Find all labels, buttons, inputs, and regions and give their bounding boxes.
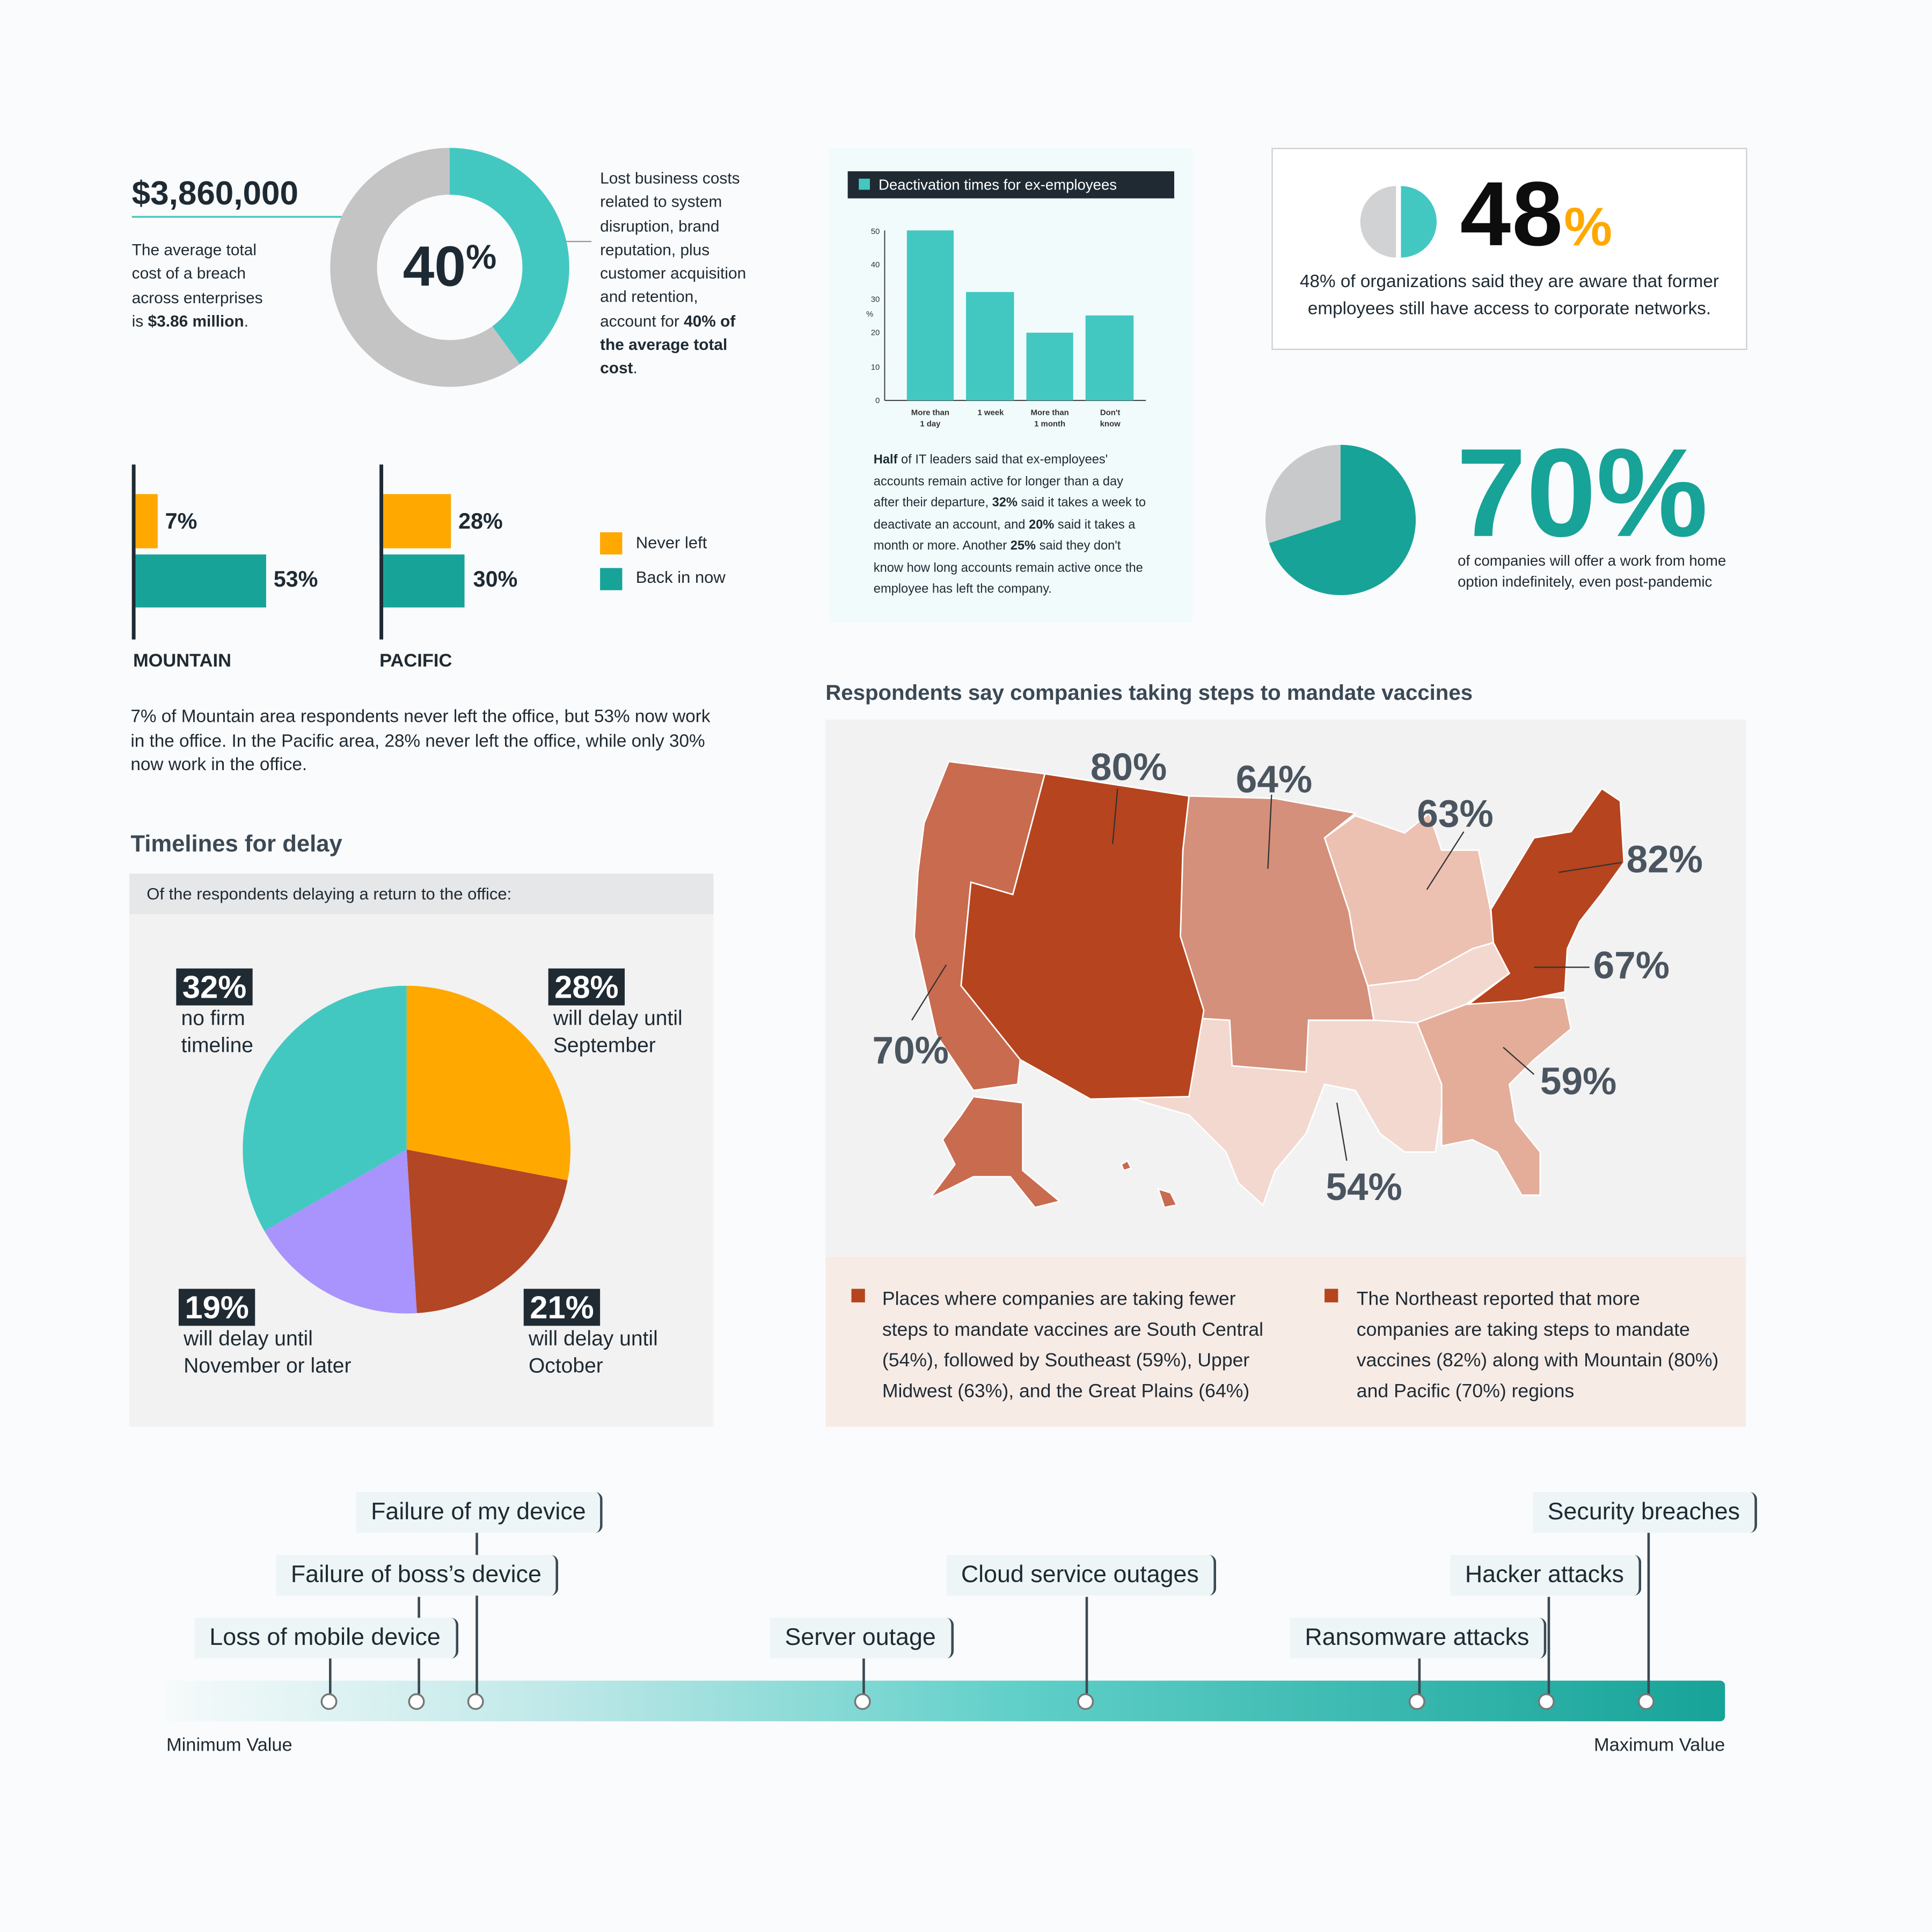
70% description: of companies will offer a work from home <box>1458 552 1726 569</box>
label 32%: timeline <box>181 1034 253 1057</box>
label 21%: 21% <box>530 1289 594 1326</box>
label 28%: will delay until <box>553 1007 683 1030</box>
bar chart: mountain vs pacific <box>132 465 517 671</box>
label 28% <box>548 968 683 1057</box>
south central <box>1128 1018 1454 1205</box>
panel header <box>129 874 713 914</box>
bar chart: 50 <box>871 227 880 236</box>
regional paragraph: 7% of Mountain area respondents never left the office, but 53% now work in the office. In the Pacific area, 28% never left the office, while only 30% now work in the office. <box>130 707 711 775</box>
bar chart: More than <box>911 408 949 418</box>
donut chart 40%: 40 <box>403 235 466 298</box>
panel: US map: 59% <box>1540 1060 1616 1103</box>
timeline connectors and dots <box>321 1533 1655 1710</box>
panel: delay pie <box>129 874 713 1427</box>
great plains <box>1180 796 1374 1072</box>
pacific <box>914 762 1045 1091</box>
bar chart: mountain vs pacific: PACIFIC <box>379 650 452 671</box>
northeast <box>1469 788 1624 1004</box>
chart caption: Half of IT leaders said that ex-employees' accounts remain active for longer than a day after their departure, 32% said it takes a week to deactivate an account, and 20% said it takes a month or more. Another 25% said they don't know how long accounts remain active once the employee has left the company. <box>874 453 1146 596</box>
big number 48%: 48% <box>1460 163 1613 265</box>
chart header <box>848 171 1174 199</box>
legend: Back in now <box>636 568 726 587</box>
bar chart: 0 <box>875 396 880 405</box>
bar chart: 40 <box>871 260 880 269</box>
bar chart: More than <box>1031 408 1069 418</box>
big number 70%: 70% <box>1457 423 1708 563</box>
bar chart: 1 month <box>1034 419 1065 428</box>
bar chart: 20 <box>871 328 880 337</box>
panel: US map: 82% <box>1627 839 1703 881</box>
label: cloud service outages: Cloud service outages <box>961 1561 1199 1588</box>
panel: US map: 67% <box>1593 945 1670 987</box>
label 28%: September <box>553 1034 656 1057</box>
70% description <box>1458 552 1726 590</box>
panel: deactivation bar chart <box>829 148 1192 622</box>
bar chart: 1 day <box>920 419 941 428</box>
bar chart: 1 week <box>977 408 1004 418</box>
donut chart 40% <box>330 148 569 387</box>
axis label max: Maximum Value <box>1594 1735 1725 1756</box>
mountain <box>961 774 1204 1099</box>
note: fewer steps: Places where companies are taking fewer steps to mandate vaccines are South Central (54%), followed by Southeast (59%), Upper Midwest (63%), and the Great Plains (64%) <box>882 1289 1263 1402</box>
bar chart: % <box>866 310 873 319</box>
panel: US map: 63% <box>1417 793 1494 836</box>
48% description: employees still have access to corporate networks. <box>1308 299 1711 319</box>
48% description: 48% of organizations said they are aware that former <box>1300 272 1719 292</box>
legend <box>600 532 726 590</box>
label: loss of mobile device: Loss of mobile device <box>209 1624 441 1651</box>
donut chart 40%: % <box>466 238 496 276</box>
label: failure of my device <box>356 1492 603 1533</box>
panel: 48% stat <box>1271 148 1747 350</box>
label: failure of my device: Failure of my device <box>371 1498 586 1525</box>
bar chart: Don't <box>1100 408 1120 418</box>
alaska <box>930 1096 1059 1208</box>
bar chart: mountain vs pacific: 30% <box>473 567 517 591</box>
panel: US map: 80% <box>1091 746 1167 788</box>
bar chart: mountain vs pacific: 28% <box>458 509 503 533</box>
bar chart: 10 <box>871 363 880 372</box>
label: hacker attacks: Hacker attacks <box>1465 1561 1624 1588</box>
upper midwest light <box>1324 813 1494 986</box>
label: security breaches <box>1533 1492 1757 1533</box>
axis label min: Minimum Value <box>166 1735 292 1756</box>
bar chart: 30 <box>871 295 880 304</box>
label 32%: no firm <box>181 1007 245 1030</box>
label 19%: 19% <box>185 1289 249 1326</box>
48% description <box>1300 272 1719 319</box>
timeline gradient bar <box>166 1681 1725 1721</box>
panel: US map: 54% <box>1326 1166 1402 1209</box>
pie chart <box>243 985 570 1314</box>
bar chart <box>866 227 1146 428</box>
label: server outage <box>770 1618 953 1658</box>
label: loss of mobile device <box>195 1618 458 1658</box>
heading: timelines for delay: Timelines for delay <box>130 832 342 858</box>
label: ransomware attacks <box>1290 1618 1547 1658</box>
bar chart: mountain vs pacific: 7% <box>165 509 197 533</box>
label 32% <box>176 968 253 1057</box>
label: failure of boss's device <box>276 1555 559 1596</box>
bar chart: mountain vs pacific: 53% <box>274 567 318 591</box>
label 21%: will delay until <box>529 1327 658 1350</box>
panel: US map: 64% <box>1236 758 1312 801</box>
label 28%: 28% <box>554 969 619 1005</box>
label: hacker attacks <box>1450 1555 1641 1596</box>
lower midwest / KY TN <box>1367 942 1510 1023</box>
label 21% <box>524 1289 658 1378</box>
panel header: Of the respondents delaying a return to the office: <box>147 884 511 903</box>
label 32%: 32% <box>182 969 246 1005</box>
label: failure of boss's device: Failure of boss’s device <box>291 1561 541 1588</box>
label 21%: October <box>529 1354 603 1378</box>
icon: pie 48 <box>1360 186 1437 258</box>
panel: US map: 70% <box>873 1029 949 1072</box>
southeast <box>1417 996 1571 1195</box>
bar chart: know <box>1100 419 1121 428</box>
70% description: option indefinitely, even post-pandemic <box>1458 573 1712 590</box>
bar chart: mountain vs pacific: MOUNTAIN <box>133 650 231 671</box>
chart header: Deactivation times for ex-employees <box>879 176 1117 193</box>
legend: Never left <box>636 533 707 552</box>
label 19%: will delay until <box>184 1327 313 1350</box>
label 19% <box>178 1289 351 1378</box>
label: security breaches: Security breaches <box>1548 1498 1740 1525</box>
label: cloud service outages <box>946 1555 1216 1596</box>
label: server outage: Server outage <box>785 1624 936 1651</box>
headline: breach cost: $3,860,000 <box>132 175 298 212</box>
pie chart 70% <box>1265 444 1416 595</box>
label: ransomware attacks: Ransomware attacks <box>1305 1624 1529 1651</box>
breach cost description: The average total cost of a breach across enterprises is $3.86 million. <box>132 240 263 330</box>
lost business costs text: Lost business costs related to system disruption, brand reputation, plus customer acquisition and retention, account for 40% of the average total cost. <box>600 169 746 377</box>
panel: US map <box>825 720 1746 1257</box>
teal connector line <box>132 216 342 218</box>
label 19%: November or later <box>184 1354 351 1378</box>
panel: map notes <box>825 1257 1746 1427</box>
note: northeast: The Northeast reported that more companies are taking steps to mandate vaccines (82%) along with Mountain (80%) and Pacific (70%) regions <box>1357 1289 1718 1402</box>
hawaii <box>1121 1161 1131 1170</box>
heading: vaccine map: Respondents say companies taking steps to mandate vaccines <box>825 680 1473 705</box>
